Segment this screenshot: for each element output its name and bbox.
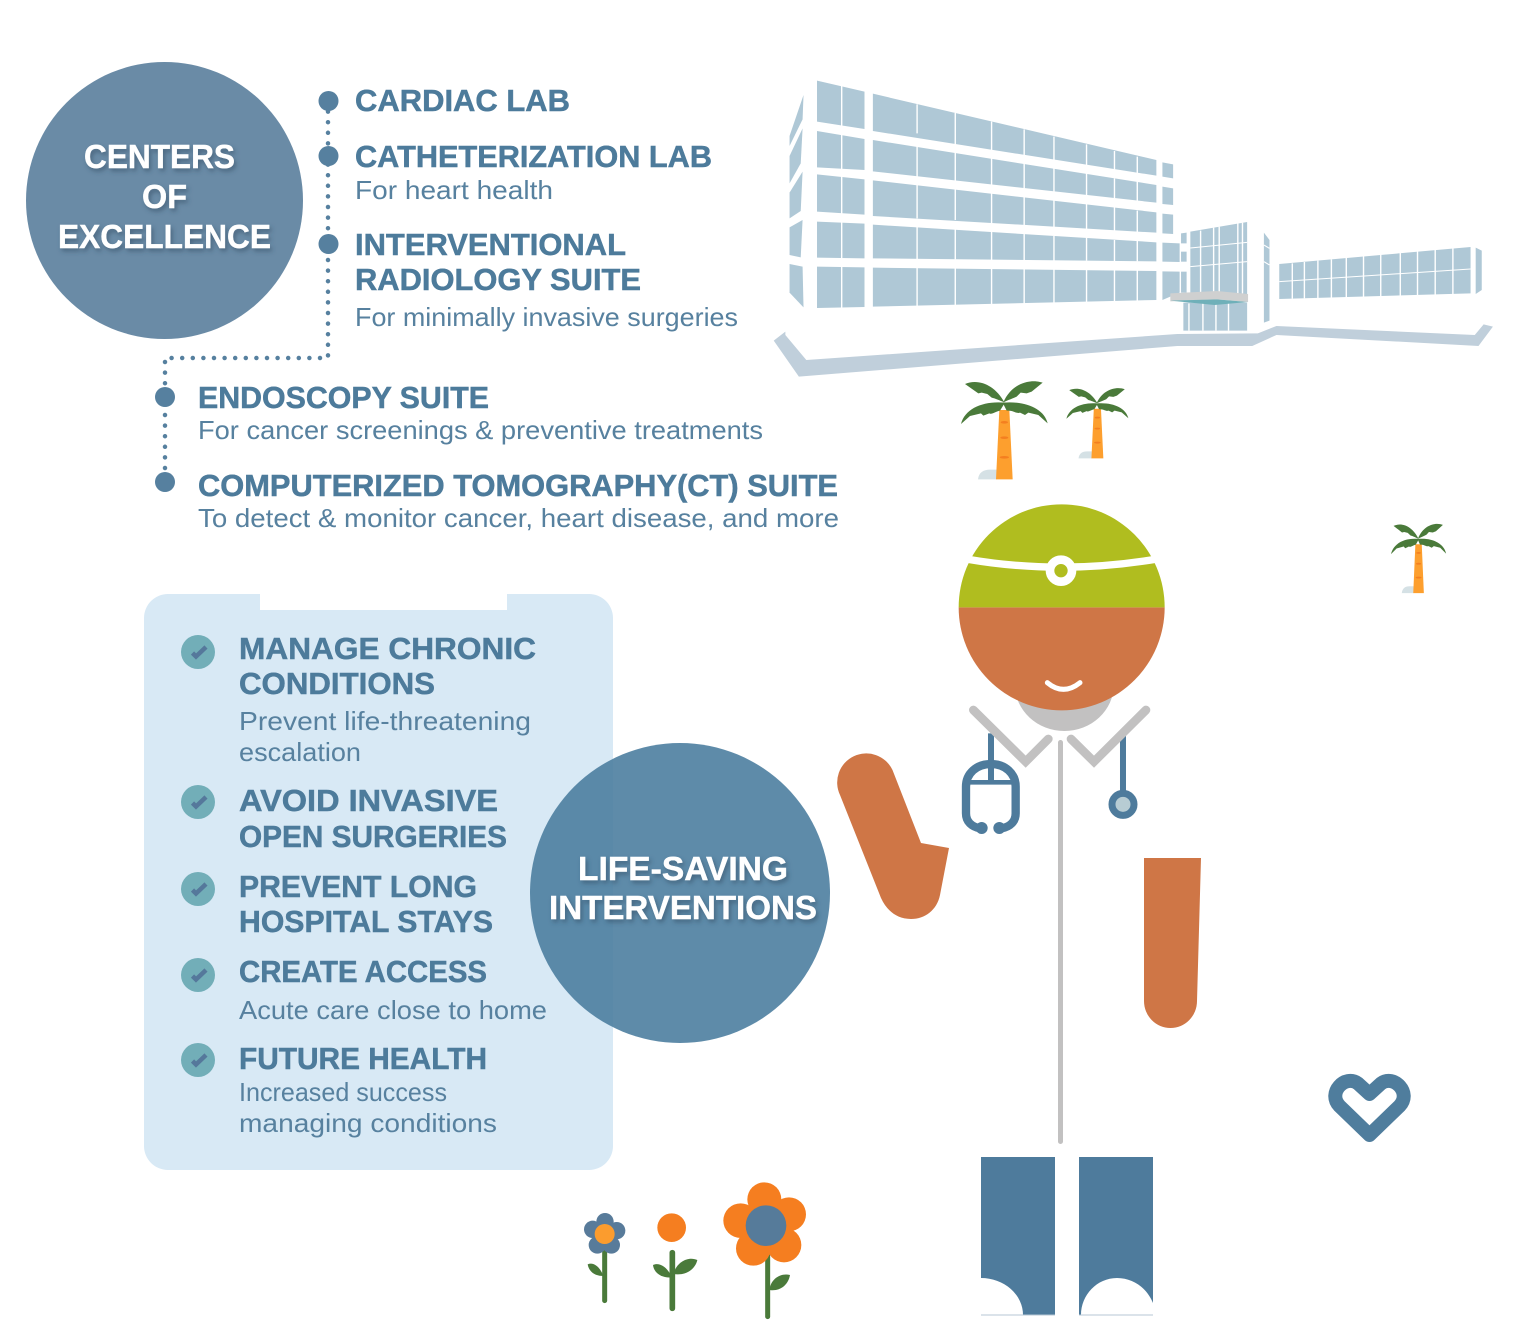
item: create access — [239, 954, 547, 1025]
item: future health: FUTURE HEALTH — [239, 1041, 487, 1076]
heading: centers of excellence — [58, 138, 271, 255]
badge: life-saving interventions — [530, 743, 830, 1043]
item: future health — [239, 1041, 497, 1138]
doctor: left trouser leg — [981, 1157, 1055, 1315]
icon: small palm tree — [1066, 388, 1128, 458]
icon: check 4 — [181, 958, 215, 992]
text block: catheterization lab: For heart health — [355, 175, 553, 205]
collar — [973, 710, 1146, 762]
text block: interventional radiology suite — [355, 227, 738, 332]
timeline: dotted connector with bullets — [155, 91, 338, 492]
item: create access: CREATE ACCESS — [239, 954, 487, 989]
icon: check 2 — [181, 785, 215, 819]
text block: computerized tomography suite: COMPUTERIZED TOMOGRAPHY(CT) SUITE — [198, 468, 838, 503]
doctor: head, collar and stethoscope — [959, 504, 1165, 834]
icon: large palm tree — [961, 381, 1048, 479]
heading: life-saving interventions: LIFE-SAVING — [578, 850, 788, 887]
heading: centers of excellence: OF — [142, 178, 187, 215]
icon: large orange flower — [723, 1182, 806, 1317]
head mirror — [1050, 560, 1072, 582]
face — [959, 607, 1165, 710]
doctor: coat zipper — [1058, 740, 1063, 1144]
text block: endoscopy suite — [198, 380, 763, 445]
text block: interventional radiology suite: For minimally invasive surgeries — [355, 302, 738, 332]
text block: interventional radiology suite: RADIOLOGY SUITE — [355, 262, 641, 297]
item: prevent long hospital stays — [239, 869, 493, 939]
doctor: trouser hem line — [981, 1314, 1153, 1316]
text block: catheterization lab: CATHETERIZATION LAB — [355, 139, 712, 174]
heading: life-saving interventions — [549, 850, 817, 926]
item: manage chronic conditions: MANAGE CHRONIC — [239, 631, 536, 666]
item: manage chronic conditions: Prevent life-threatening — [239, 706, 531, 736]
heading: life-saving interventions: INTERVENTIONS — [549, 889, 817, 926]
doctor: right trouser leg — [1079, 1157, 1153, 1315]
item: avoid invasive open surgeries: OPEN SURGERIES — [239, 819, 507, 854]
icon: distant palm tree — [1391, 524, 1446, 593]
item: prevent long hospital stays: PREVENT LONG — [239, 869, 477, 904]
item: create access: Acute care close to home — [239, 995, 547, 1025]
item: manage chronic conditions: CONDITIONS — [239, 666, 435, 701]
illustration: doctor — [837, 504, 1201, 1315]
item: future health: managing conditions — [239, 1108, 497, 1138]
icon: check 3 — [181, 872, 215, 906]
illustration: hospital building — [774, 81, 1493, 377]
item: prevent long hospital stays: HOSPITAL STAYS — [239, 904, 493, 939]
item: avoid invasive open surgeries — [239, 783, 507, 854]
item: future health: Increased success — [239, 1077, 447, 1107]
text block: interventional radiology suite: INTERVENTIONAL — [355, 227, 626, 262]
icon: check 5 — [181, 1043, 215, 1077]
neck — [1015, 639, 1114, 731]
panel: life-saving interventions list — [144, 594, 613, 1170]
smile — [1047, 683, 1080, 689]
doctor: raised left arm — [837, 753, 949, 919]
text block: computerized tomography suite: To detect & monitor cancer, heart disease, and more — [198, 503, 839, 533]
head mirror band — [968, 559, 1155, 567]
icon: entrance canopy — [1170, 291, 1248, 305]
icon: check 1 — [181, 635, 215, 669]
text block: cardiac lab: CARDIAC LAB — [355, 83, 570, 118]
text block: computerized tomography suite — [198, 468, 839, 533]
icon: blue flower — [584, 1213, 625, 1301]
text block: endoscopy suite: For cancer screenings & preventive treatments — [198, 415, 763, 445]
text block: endoscopy suite: ENDOSCOPY SUITE — [198, 380, 489, 415]
icon: orange bud flower — [653, 1213, 697, 1308]
heading: centers of excellence: EXCELLENCE — [58, 218, 271, 255]
stethoscope — [966, 733, 1134, 834]
doctor: lowered right arm — [1144, 858, 1201, 1028]
item: manage chronic conditions: escalation — [239, 737, 361, 767]
surgical cap — [959, 504, 1165, 607]
item: manage chronic conditions — [239, 631, 536, 767]
item: avoid invasive open surgeries: AVOID INVASIVE — [239, 783, 498, 818]
panel: centers of excellence badge — [26, 62, 303, 339]
text block: catheterization lab — [355, 139, 712, 205]
icon: heart — [1335, 1081, 1404, 1135]
heading: centers of excellence: CENTERS — [84, 138, 235, 175]
